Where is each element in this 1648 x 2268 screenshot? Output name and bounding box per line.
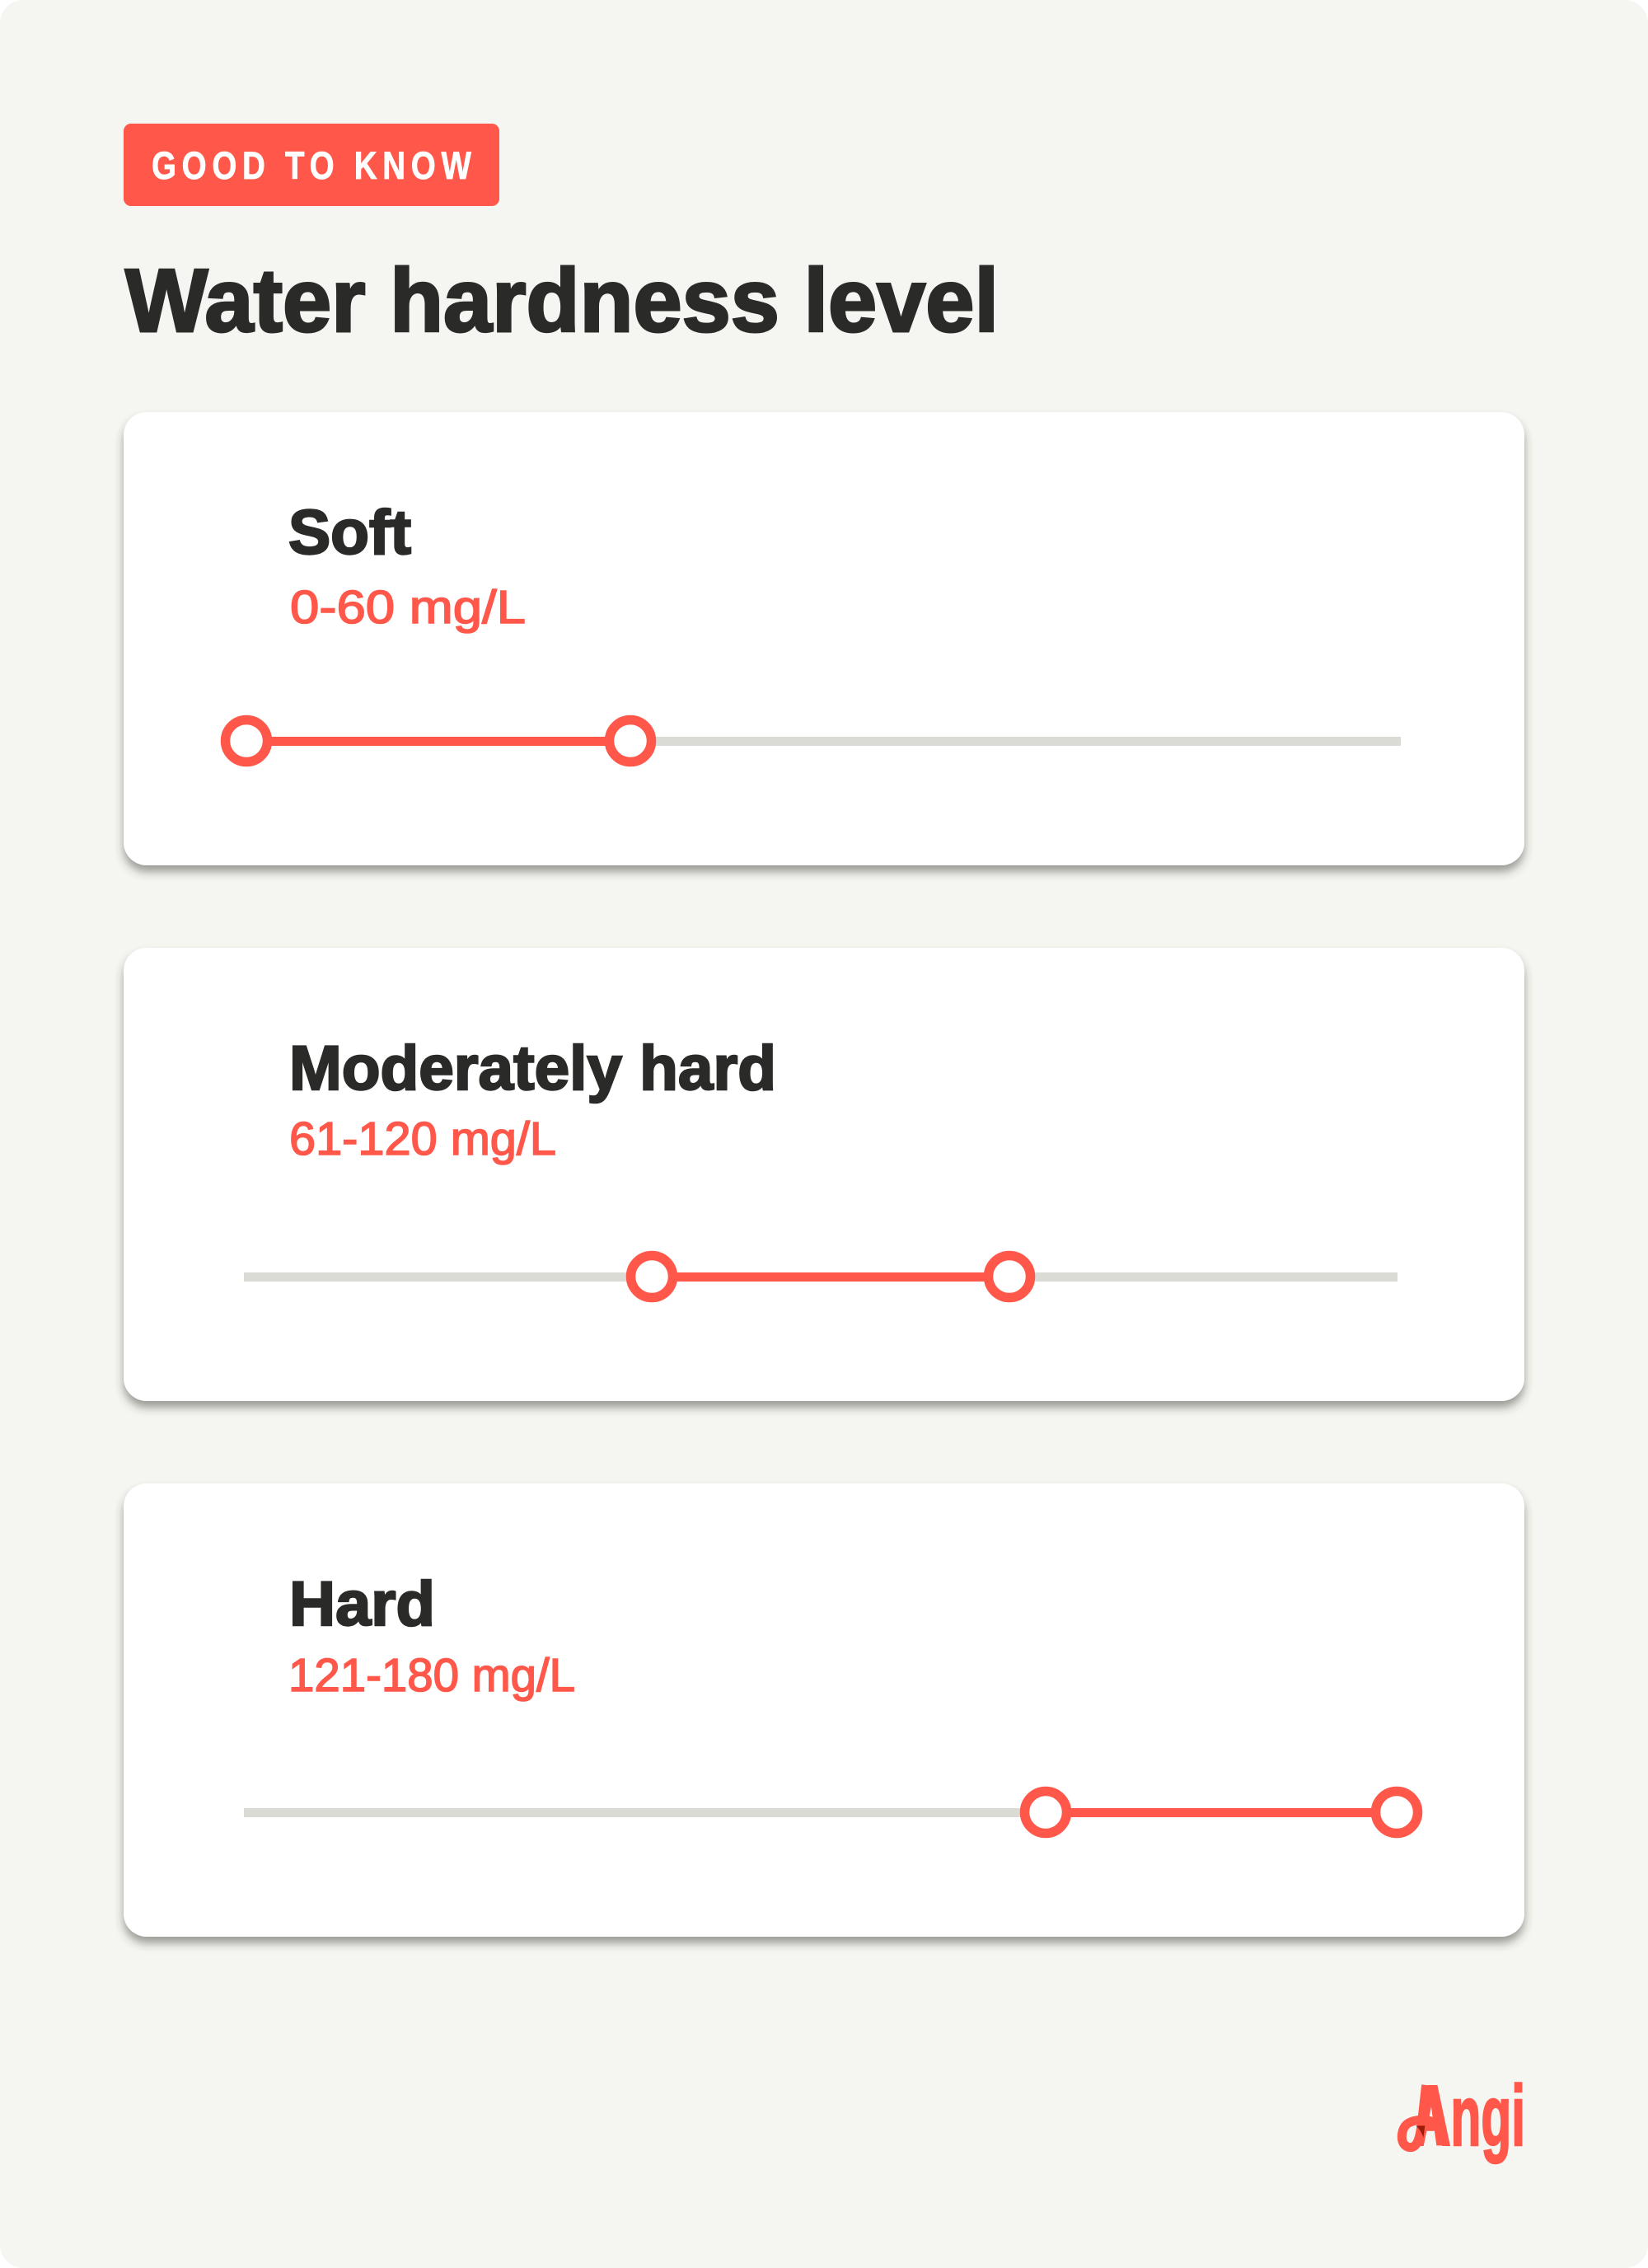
panel: moderately hard bbox=[124, 948, 1524, 1401]
badge: good to know: GOOD TO KNOW bbox=[152, 144, 475, 188]
heading: hard: Hard bbox=[289, 1569, 435, 1639]
range: moderately hard: 61-120 mg/L bbox=[289, 1113, 556, 1165]
title: Water hardness level bbox=[125, 251, 999, 351]
panel: soft bbox=[124, 412, 1524, 865]
panel: hard bbox=[124, 1483, 1524, 1937]
heading: soft: Soft bbox=[288, 498, 411, 568]
slider: soft bbox=[226, 720, 1401, 761]
slider: moderately hard bbox=[244, 1256, 1398, 1297]
range: soft: 0-60 mg/L bbox=[290, 581, 526, 634]
logo: Angi: Angi bbox=[1415, 2069, 1525, 2164]
badge: good to know bbox=[124, 124, 499, 206]
logo: Angi bbox=[1402, 2069, 1525, 2164]
heading: moderately hard: Moderately hard bbox=[289, 1033, 776, 1104]
slider: hard bbox=[244, 1792, 1417, 1833]
range: hard: 121-180 mg/L bbox=[288, 1649, 575, 1702]
